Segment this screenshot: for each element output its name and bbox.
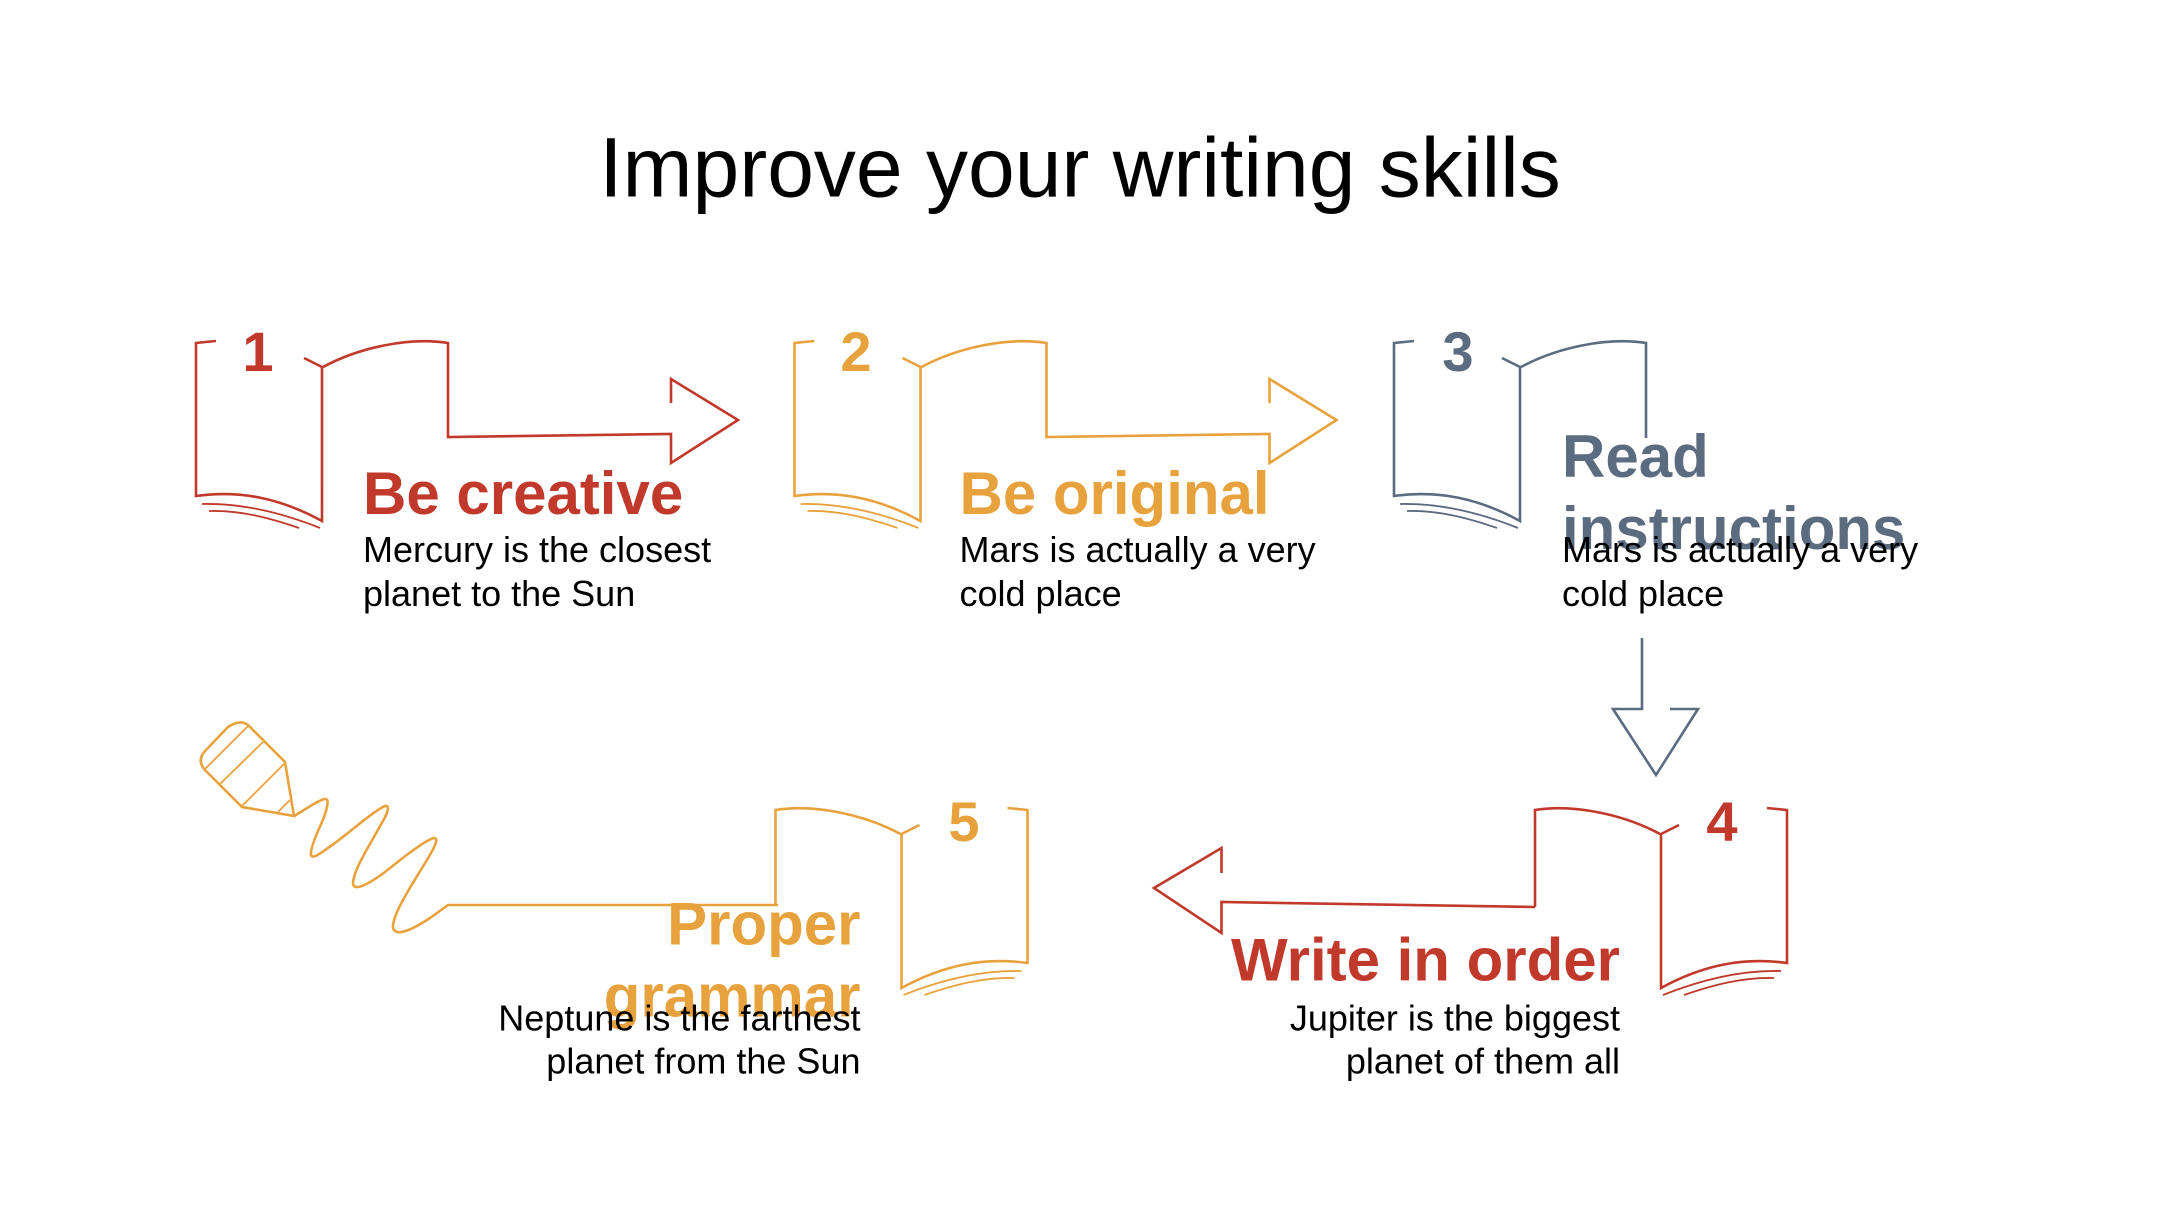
arrow: down — [1613, 638, 1698, 775]
heading: be original: Be original — [960, 460, 1270, 527]
description 1: planet to the Sun — [363, 573, 635, 614]
description 4: Jupiter is the biggest — [1290, 998, 1620, 1038]
heading: read instructions: instructions — [1562, 495, 1905, 562]
description 4: planet of them all — [1346, 1040, 1620, 1082]
heading: proper grammar: grammar — [604, 962, 860, 1030]
icon: open book with arrow 4 — [1154, 808, 1787, 995]
number 3: 3 — [1442, 320, 1474, 383]
step 4: write in order — [1154, 790, 1787, 1082]
step 5: proper grammar — [201, 722, 1028, 1082]
step 1: be creative — [196, 320, 738, 614]
description 3: Mars is actually a very — [1562, 529, 1918, 570]
icon: open book with arrow 2 — [794, 341, 1336, 528]
icon: open book 3 — [1394, 341, 1646, 528]
description 2: cold place — [960, 573, 1122, 614]
number 4: 4 — [1706, 790, 1738, 853]
step 3: read instructions — [1394, 320, 1918, 775]
icon: pencil with scribble line — [201, 722, 778, 932]
description 5: Neptune is the farthest — [498, 998, 860, 1038]
heading: be creative: Be creative — [363, 460, 683, 527]
number 1: 1 — [242, 320, 274, 383]
heading: proper grammar: Proper — [667, 890, 860, 958]
description 5: planet from the Sun — [546, 1040, 860, 1082]
heading: write in order: Write in order — [1231, 926, 1620, 994]
description 3: cold place — [1562, 573, 1724, 614]
step 2: be original — [794, 320, 1336, 614]
number 5: 5 — [948, 790, 980, 853]
description 2: Mars is actually a very — [960, 529, 1316, 570]
icon: open book with squiggle 5 — [776, 808, 1028, 995]
title: Improve your writing skills — [599, 120, 1561, 214]
heading: read instructions: Read — [1562, 423, 1709, 490]
icon: open book with arrow 1 — [196, 341, 738, 528]
number 2: 2 — [840, 320, 872, 383]
description 1: Mercury is the closest — [363, 529, 711, 570]
